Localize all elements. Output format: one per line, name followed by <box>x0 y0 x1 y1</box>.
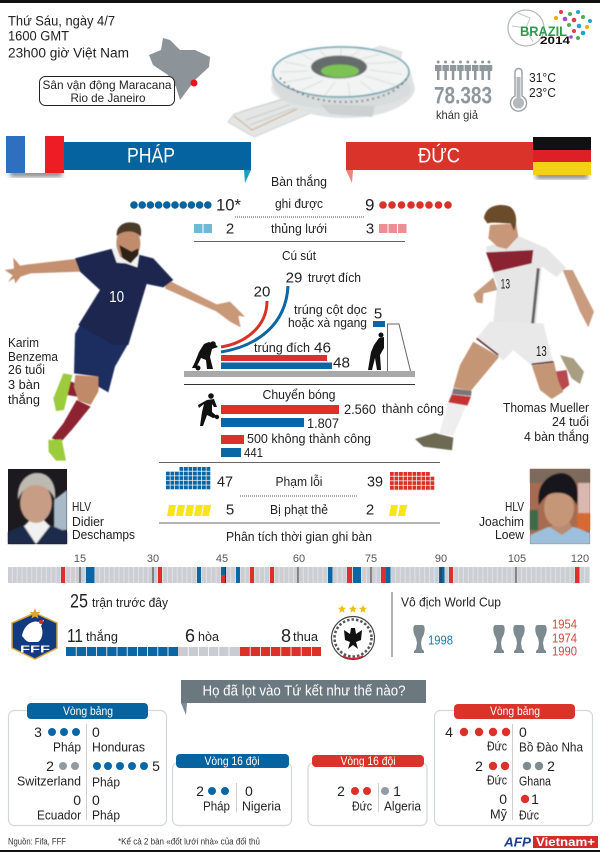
spectators count: 78.383 <box>434 82 492 110</box>
last 25 matches: thắng <box>86 629 118 644</box>
passes chart: 2.560 <box>344 401 376 417</box>
panel: Germany round of 16: Algeria <box>384 798 422 814</box>
last 25 matches <box>66 592 321 656</box>
goals scored: 10* <box>216 196 241 214</box>
fouls row: Phạm lỗi <box>276 474 322 489</box>
cards row: 5 <box>226 502 234 518</box>
trophy Germany 3 <box>535 625 547 653</box>
Benzema caption: Benzema <box>8 350 58 364</box>
panel: France round of 16: Pháp <box>203 798 230 814</box>
panel: France round of 16 <box>172 754 292 826</box>
World Cup titles: Vô địch World Cup <box>401 594 501 610</box>
cards row: Bị phạt thẻ <box>270 503 328 517</box>
icon: row of spectators <box>435 60 492 80</box>
passes chart: thành công <box>382 402 444 416</box>
panel: Germany group stage: Bồ Đào Nha <box>519 740 584 754</box>
passes chart: 1.807 <box>307 415 339 431</box>
Loew caption: Joachim <box>479 515 524 529</box>
Deschamps caption <box>72 500 135 542</box>
spectators count: khán giả <box>436 108 478 122</box>
logo: French federation crest <box>12 608 57 659</box>
Benzema caption <box>8 336 58 407</box>
panel: France group stage: Honduras <box>92 740 145 754</box>
timeline minute labels: 105 <box>508 553 526 565</box>
icon: Brazil map <box>149 38 210 100</box>
logo: Vietnam+: Vietnam+ <box>536 835 595 849</box>
panel: Germany group stage: 1 <box>531 791 539 807</box>
passes chart: 441 <box>244 446 263 460</box>
Benzema caption: 3 bàn <box>8 378 40 392</box>
last 25 matches: 25 <box>70 592 88 612</box>
goal timing timeline <box>8 553 590 583</box>
last 25 matches: trận trước đây <box>92 596 169 610</box>
panel: France group stage: Pháp <box>92 774 120 790</box>
panel: Germany round of 16: Vòng 16 đội <box>340 754 396 768</box>
top bar <box>0 0 600 3</box>
goals scored <box>130 196 452 214</box>
temperatures <box>529 71 556 100</box>
banner: Germany: ĐỨC <box>418 144 460 168</box>
stadium label <box>40 76 174 106</box>
timeline minute labels: 75 <box>365 553 377 565</box>
heading: how they reached the quarter-finals <box>181 680 426 715</box>
goals conceded <box>194 220 406 238</box>
panel: Germany group stage: Đức <box>487 738 507 754</box>
panel: France group stage: Pháp <box>92 808 120 822</box>
logo: Brazil 2014: BRAZIL <box>520 23 567 39</box>
shots chart: trượt đích <box>308 271 361 285</box>
player: Benzema: 10 <box>109 289 124 306</box>
Mueller caption: Thomas Mueller <box>503 401 589 415</box>
logo: Brazil 2014: 2014 <box>540 35 571 47</box>
Loew caption <box>479 500 525 542</box>
cards row: 2 <box>366 502 374 518</box>
Deschamps caption: Deschamps <box>72 528 135 542</box>
timeline minute labels: 120 <box>571 553 589 565</box>
match date and time: 1600 GMT <box>8 28 69 44</box>
panel: France group stage: 2 <box>46 758 54 774</box>
spectators count <box>434 82 492 122</box>
source note: Nguồn: Fifa, FFF <box>8 836 66 848</box>
panel: Germany round of 16: 2 <box>337 783 345 799</box>
passes chart <box>221 401 444 460</box>
Loew caption: HLV <box>505 500 525 514</box>
last 25 matches: 11 <box>67 626 83 646</box>
timeline minute labels: 45 <box>216 553 228 565</box>
icon: thermometer <box>510 69 526 111</box>
portrait: Deschamps <box>8 469 67 544</box>
player: Mueller: 13 <box>501 275 510 291</box>
shots chart <box>184 270 415 377</box>
heading: goal timing: Phân tích thời gian ghi bàn <box>226 530 372 544</box>
panel: Germany group stage: Đức <box>519 808 539 822</box>
panel: Germany group stage: Mỹ <box>490 806 507 822</box>
fouls row: 47 <box>217 474 233 490</box>
timeline minute labels: 90 <box>435 553 447 565</box>
Deschamps caption: HLV <box>72 500 92 514</box>
trophy Germany 2 <box>513 625 525 653</box>
World Cup titles: 1990 <box>552 644 577 658</box>
goals scored: ghi được <box>275 197 323 211</box>
panel: France group stage: Vòng bảng <box>63 704 113 718</box>
temperatures: 31°C <box>529 71 556 85</box>
panel: Germany group stage: 0 <box>519 724 527 740</box>
timeline minute labels <box>74 553 589 565</box>
shots chart: hoặc xà ngang <box>288 316 367 330</box>
World Cup titles: 1974 <box>552 630 577 646</box>
heading: goals: Bàn thắng <box>271 174 327 189</box>
panel: Germany round of 16 <box>308 754 427 826</box>
player: Mueller <box>415 205 594 450</box>
panel: Germany group stage: 4 <box>445 724 453 740</box>
shots chart: trúng cột dọc <box>294 303 367 317</box>
player: Mueller: 13 <box>536 343 547 360</box>
last 25 matches: 8 <box>281 626 291 646</box>
timeline minute labels: 15 <box>74 553 86 565</box>
shots chart: trúng đích <box>254 341 310 355</box>
panel: Germany round of 16: 1 <box>393 783 401 799</box>
goals conceded: thủng lưới <box>271 222 327 236</box>
trophy France <box>413 625 425 653</box>
stadium label: Sân vận động Maracana <box>42 78 172 92</box>
panel: France group stage: 0 <box>73 792 81 808</box>
logo: German federation crest <box>332 605 374 660</box>
shots chart: 48 <box>333 354 350 372</box>
World Cup titles: 1998 <box>428 632 453 648</box>
shots chart: 46 <box>314 340 331 356</box>
World Cup titles: 1954 <box>552 616 577 632</box>
panel: Germany group stage: Ghana <box>519 774 552 788</box>
panel: France group stage: Pháp <box>53 740 81 754</box>
trophy Germany 1 <box>493 625 505 653</box>
heading: shots: Cú sút <box>282 249 316 263</box>
heading: how they reached the quarter-finals: Họ đã lọt vào Tứ kết như thế nào? <box>202 682 406 700</box>
Benzema caption: thắng <box>8 392 40 407</box>
last 25 matches: hòa <box>198 630 219 644</box>
heading: passes: Chuyển bóng <box>262 388 336 402</box>
panel: Germany group stage: 0 <box>499 791 507 807</box>
panel: France group stage <box>8 703 166 826</box>
panel: Germany group stage <box>434 704 592 826</box>
logo: Brazil 2014 <box>508 10 592 47</box>
shots chart: 5 <box>374 306 382 322</box>
icon: shooter silhouette <box>192 341 218 370</box>
panel: Germany group stage: 2 <box>475 758 483 774</box>
bottom bar <box>0 850 600 852</box>
match date and time <box>8 14 129 60</box>
panel: Germany round of 16: Đức <box>352 798 372 814</box>
logo: AFP: AFP <box>503 834 531 850</box>
panel: Germany group stage: 2 <box>547 758 555 774</box>
panel: France group stage: 3 <box>34 724 42 740</box>
shots chart: 20 <box>254 284 270 300</box>
match date and time: Thứ Sáu, ngày 4/7 <box>8 14 115 28</box>
panel: France round of 16: 0 <box>245 783 253 799</box>
Mueller caption <box>503 401 589 444</box>
last 25 matches: 6 <box>185 626 195 646</box>
timeline minute labels: 30 <box>147 553 159 565</box>
fouls row: 39 <box>367 474 383 490</box>
Deschamps caption: Didier <box>72 515 104 529</box>
panel: France group stage: 5 <box>152 758 160 774</box>
panel: Germany group stage: Vòng bảng <box>490 704 540 718</box>
logo: French federation crest: FFF <box>20 644 50 656</box>
Benzema caption: 26 tuổi <box>8 363 45 377</box>
temperatures: 23°C <box>529 86 556 100</box>
icon: passing silhouette <box>198 393 219 426</box>
Mueller caption: 4 bàn thắng <box>524 429 589 444</box>
panel: France group stage: Ecuador <box>37 808 82 822</box>
shots chart: 29 <box>286 270 302 286</box>
panel: France group stage: Switzerland <box>17 774 81 788</box>
banner: Germany <box>346 137 591 183</box>
banner: France: PHÁP <box>127 144 175 168</box>
passes chart: 500 không thành công <box>247 432 371 446</box>
match date and time: 23h00 giờ Việt Nam <box>8 46 129 60</box>
Mueller caption: 24 tuổi <box>552 415 589 429</box>
panel: France round of 16: Nigeria <box>242 798 282 814</box>
goals scored: 9 <box>365 196 374 214</box>
Benzema caption: Karim <box>8 336 39 350</box>
player: Benzema <box>5 222 245 461</box>
panel: Germany group stage: Đức <box>487 772 507 788</box>
icon: goalkeeper silhouette <box>368 332 384 370</box>
footnote: *Kể cả 2 bàn «đốt lưới nhà» của đối thủ <box>118 836 260 848</box>
portrait: Loew <box>530 469 590 544</box>
panel: France group stage: 0 <box>92 792 100 808</box>
fouls row <box>166 467 435 490</box>
panel: France round of 16: Vòng 16 đội <box>204 754 260 768</box>
goals conceded: 2 <box>226 220 234 238</box>
timeline minute labels: 60 <box>293 553 305 565</box>
illustration: Maracana stadium <box>228 46 415 137</box>
last 25 matches: thua <box>293 630 318 644</box>
panel: France round of 16: 2 <box>196 783 204 799</box>
World Cup titles <box>401 594 577 658</box>
goals conceded: 3 <box>366 220 374 238</box>
cards row <box>167 502 407 518</box>
stadium label: Rio de Janeiro <box>70 91 146 105</box>
banner: France <box>6 136 251 183</box>
Loew caption: Loew <box>495 528 525 542</box>
panel: France group stage: 0 <box>92 724 100 740</box>
